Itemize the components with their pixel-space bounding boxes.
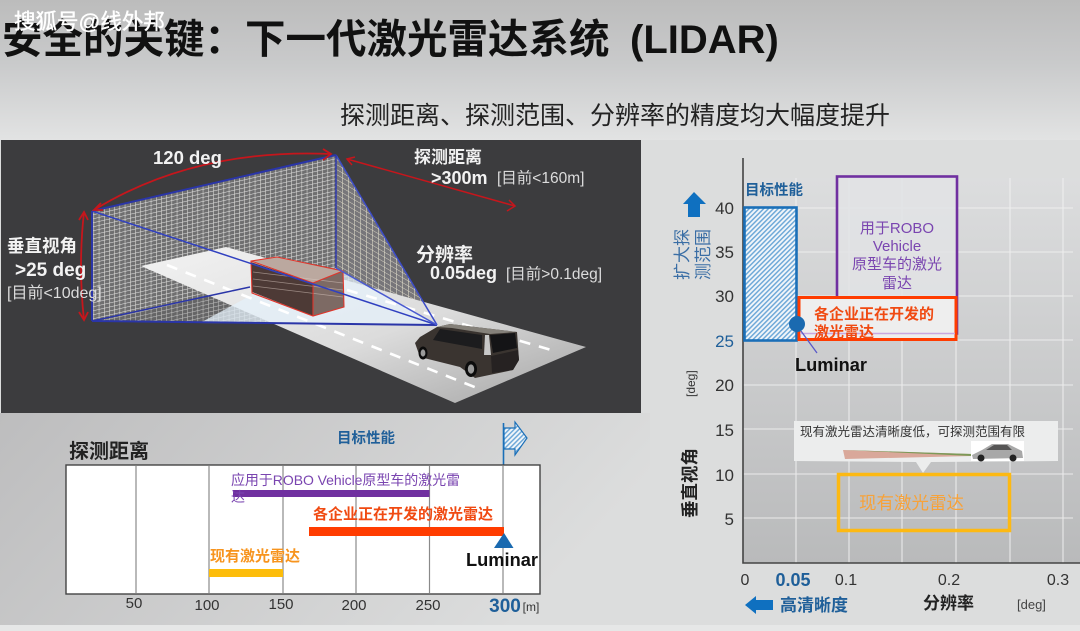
y axis numbers: 15 bbox=[715, 421, 734, 440]
marker: Luminar bbox=[789, 316, 867, 375]
y axis label: expand range: 测范围 bbox=[694, 229, 713, 280]
title: (LIDAR) bbox=[630, 18, 779, 62]
robo vehicle lidar region: 用于ROBO bbox=[860, 220, 934, 237]
road bbox=[141, 247, 586, 403]
existing lidar region: 现有激光雷达 bbox=[859, 493, 964, 513]
label: detection range: >300m bbox=[431, 168, 488, 188]
y axis label: expand range: 扩大探 bbox=[673, 229, 692, 280]
axis labels: 200 bbox=[341, 597, 367, 614]
panel: lidar scene bbox=[1, 140, 641, 413]
arrow: detection range bbox=[347, 157, 515, 211]
target performance region bbox=[744, 181, 803, 340]
grid bbox=[743, 178, 1073, 563]
title: 安全的关键：下一代激光雷达系统 bbox=[2, 16, 610, 62]
axis labels: [m] bbox=[523, 600, 539, 614]
label: vertical field of view bbox=[7, 236, 102, 302]
marker: Luminar bbox=[466, 533, 538, 570]
y axis numbers: 35 bbox=[715, 243, 734, 262]
axis labels: 250 bbox=[415, 597, 441, 614]
icon: left arrow bbox=[745, 596, 773, 614]
frustum blue lines bbox=[92, 155, 437, 325]
label: resolution: 0.05deg bbox=[430, 263, 497, 283]
panel: resolution vs vertical field of view chart bbox=[673, 158, 1080, 615]
chart plot box bbox=[66, 465, 540, 594]
y axis label: vertical field of view: 垂直视角 bbox=[680, 448, 700, 518]
panel: detection range chart bbox=[66, 422, 540, 617]
label: high resolution: 高清晰度 bbox=[780, 595, 848, 615]
y axis label: expand range bbox=[673, 229, 713, 280]
icon: target arrow bbox=[504, 422, 527, 465]
robo vehicle lidar region bbox=[837, 176, 957, 334]
label: vertical field of view: [目前<10deg] bbox=[7, 284, 102, 302]
y axis numbers: 25 bbox=[715, 332, 734, 351]
axis labels: 150 bbox=[268, 596, 294, 613]
label: 120 deg: 120 deg bbox=[153, 147, 222, 168]
lidar in development region bbox=[799, 298, 956, 341]
arrow: vertical field of view bbox=[79, 212, 88, 320]
y axis numbers: 10 bbox=[715, 466, 734, 485]
plot background bbox=[743, 178, 1080, 563]
label: resolution: [目前>0.1deg] bbox=[506, 265, 602, 283]
target vehicle in red box bbox=[251, 257, 344, 316]
bar: existing lidar bbox=[209, 548, 300, 577]
axis labels: 300 bbox=[489, 596, 521, 617]
marker: Luminar: Luminar bbox=[795, 355, 867, 375]
subtitle: 探测距离、探测范围、分辨率的精度均大幅度提升 bbox=[340, 102, 890, 130]
x axis numbers bbox=[741, 570, 1069, 590]
arrow: horizontal field of view bbox=[94, 149, 331, 210]
ego vehicle bbox=[415, 324, 519, 378]
axes bbox=[743, 158, 1080, 563]
x axis unit: [deg] bbox=[1017, 597, 1046, 612]
y axis numbers: 30 bbox=[715, 287, 734, 306]
label: vertical field of view: 垂直视角 bbox=[7, 236, 77, 256]
x axis numbers: 0.1 bbox=[835, 572, 857, 589]
robo vehicle lidar region: 雷达 bbox=[882, 275, 912, 292]
label: detection range: [目前<160m] bbox=[497, 169, 584, 187]
label: detection range: 探测距离 bbox=[414, 147, 482, 167]
label: resolution: 分辨率 bbox=[416, 244, 473, 266]
watermark: 搜狐号@线外邦 bbox=[14, 10, 165, 34]
robo vehicle lidar region: 原型车的激光 bbox=[852, 256, 942, 273]
bar: robo vehicle lidar: 达 bbox=[231, 489, 245, 505]
label: resolution bbox=[416, 244, 602, 283]
marker: Luminar: Luminar bbox=[466, 550, 538, 570]
target performance label: 目标性能 bbox=[337, 429, 395, 447]
y axis numbers: 40 bbox=[715, 199, 734, 218]
chart title: 探测距离 bbox=[69, 439, 149, 463]
axis labels: 50 bbox=[126, 595, 142, 612]
label: detection range bbox=[414, 147, 584, 188]
existing lidar region bbox=[838, 474, 1010, 530]
bar: existing lidar: 现有激光雷达 bbox=[210, 548, 300, 565]
label: vertical field of view: >25 deg bbox=[15, 260, 86, 281]
icon: up arrow bbox=[683, 192, 706, 217]
x axis title: 分辨率 bbox=[923, 593, 974, 613]
x axis numbers: 0 bbox=[741, 572, 750, 589]
lidar in development region: 激光雷达 bbox=[814, 324, 874, 341]
lidar grid wall bbox=[92, 155, 437, 325]
target performance region: 目标性能 bbox=[745, 181, 803, 199]
bar: robo vehicle lidar bbox=[231, 472, 460, 505]
axis labels bbox=[126, 595, 539, 617]
x axis numbers: 0.2 bbox=[938, 572, 960, 589]
y axis numbers: 5 bbox=[725, 510, 734, 529]
callout: existing lidar bbox=[794, 421, 1058, 473]
y axis numbers: 20 bbox=[715, 376, 734, 395]
bar: lidar in development: 各企业正在开发的激光雷达 bbox=[313, 505, 493, 523]
axis labels: 100 bbox=[194, 597, 220, 614]
callout: existing lidar: 现有激光雷达清晰度低，可探测范围有限 bbox=[800, 424, 1026, 439]
x axis numbers: 0.05 bbox=[775, 570, 811, 590]
x axis numbers: 0.3 bbox=[1047, 572, 1069, 589]
lidar in development region: 各企业正在开发的 bbox=[814, 305, 934, 323]
robo vehicle lidar region: Vehicle bbox=[873, 238, 921, 255]
bar: lidar in development bbox=[309, 505, 504, 536]
y axis numbers bbox=[715, 199, 734, 529]
y axis unit: [deg] bbox=[684, 370, 698, 397]
bar: robo vehicle lidar: 应用于ROBO Vehicle原型车的激光雷 bbox=[231, 472, 460, 488]
